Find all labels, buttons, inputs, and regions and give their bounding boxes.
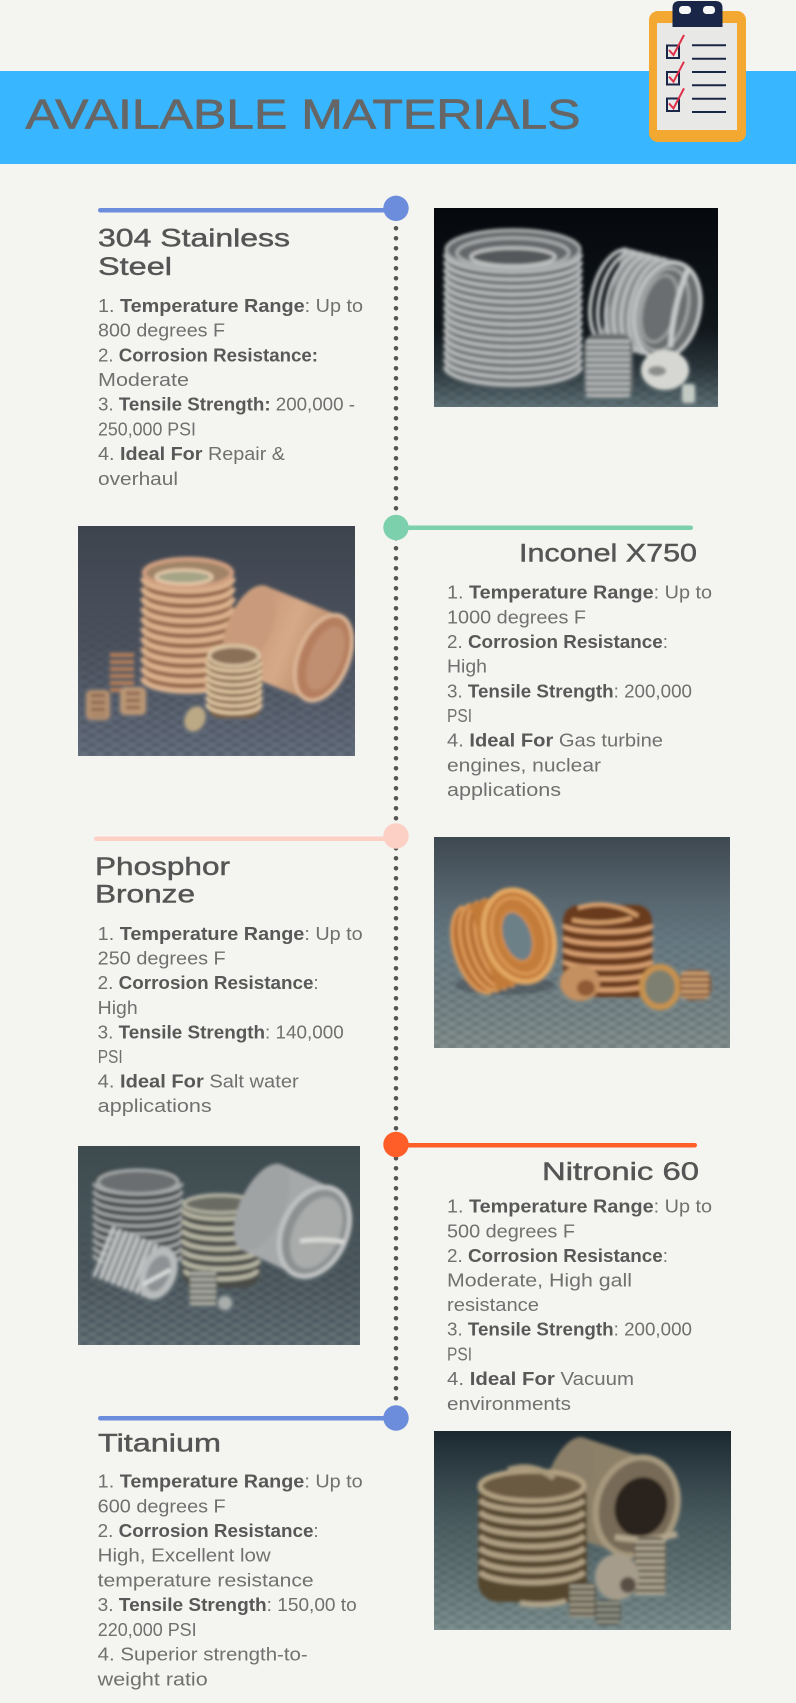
- heading: 304 Stainless Steel: 304 Stainless: [98, 225, 290, 253]
- text block: Inconel specs: 1. Temperature Range : Up to: [447, 583, 712, 603]
- timeline node 2: [383, 515, 409, 540]
- heading: 304 Stainless Steel: [98, 225, 290, 281]
- text block: Phosphor Bronze specs: High: [98, 998, 138, 1018]
- text block: Titanium specs: 4. Superior strength-to-: [98, 1645, 308, 1665]
- text block: Phosphor Bronze specs: applications: [98, 1096, 212, 1116]
- panel: 304 Stainless Steel: [98, 196, 409, 489]
- text block: Titanium specs: weight ratio: [97, 1670, 208, 1690]
- text block: Nitronic specs: 4. Ideal For Vacuum: [447, 1369, 634, 1389]
- photo: stainless steel coils: [434, 208, 718, 407]
- text block: 304 specs: 2. Corrosion Resistance:: [98, 345, 318, 365]
- photo: inconel coils: [78, 526, 355, 756]
- text block: Inconel specs: applications: [447, 780, 561, 800]
- heading: Phosphor Bronze: [95, 853, 230, 909]
- text block: Titanium specs: 3. Tensile Strength : 150,00 to: [98, 1595, 357, 1615]
- connector line 4: [396, 1143, 697, 1148]
- text block: Inconel specs: 2. Corrosion Resistance :: [447, 632, 668, 652]
- timeline dotted line: [394, 228, 398, 1400]
- text block: Nitronic specs: Moderate, High gall: [447, 1271, 632, 1291]
- text block: Inconel specs: PSI: [447, 706, 472, 726]
- text block: 304 specs: 250,000 PSI: [98, 419, 196, 439]
- text block: Titanium specs: 2. Corrosion Resistance :: [98, 1521, 319, 1541]
- heading: Nitronic 60: Nitronic 60: [542, 1158, 699, 1186]
- photo: phosphor bronze coils: [434, 837, 730, 1048]
- text block: Inconel specs: 3. Tensile Strength : 200,000: [447, 681, 692, 701]
- text block: Inconel specs: 4. Ideal For Gas turbine: [447, 731, 663, 751]
- title: AVAILABLE MATERIALS: [26, 90, 580, 137]
- text block: Phosphor Bronze specs: PSI: [98, 1047, 123, 1067]
- text block: Nitronic specs: 2. Corrosion Resistance :: [447, 1246, 668, 1266]
- photo: nitronic coils: [78, 1146, 360, 1345]
- text block: 304 specs: overhaul: [98, 469, 178, 489]
- text block: 304 specs: [98, 296, 363, 489]
- text block: 304 specs: 3. Tensile Strength: 200,000 -: [98, 395, 355, 415]
- panel: Inconel X750: [383, 515, 712, 800]
- connector line 5: [98, 1416, 396, 1420]
- timeline node 5: [383, 1405, 409, 1431]
- text block: Inconel specs: 1000 degrees F: [447, 607, 586, 627]
- text block: 304 specs: Moderate: [98, 370, 189, 390]
- text block: 304 specs: 800 degrees F: [98, 321, 225, 341]
- text block: 304 specs: 4. Ideal For Repair &: [98, 444, 285, 464]
- connector line 1: [98, 208, 396, 212]
- text block: Titanium specs: High, Excellent low: [98, 1546, 272, 1566]
- text block: Nitronic specs: 3. Tensile Strength : 200,000: [447, 1320, 692, 1340]
- connector line 3: [94, 836, 396, 841]
- heading: Inconel X750: Inconel X750: [519, 540, 697, 568]
- icon: clipboard checklist: [649, 1, 746, 142]
- text block: Phosphor Bronze specs: 1. Temperature Range : Up to: [98, 924, 363, 944]
- text block: Nitronic specs: [447, 1197, 712, 1414]
- text block: Nitronic specs: PSI: [447, 1344, 472, 1364]
- panel: Phosphor Bronze: [94, 823, 409, 1116]
- text block: Inconel specs: High: [447, 657, 487, 677]
- text block: Titanium specs: 600 degrees F: [98, 1496, 226, 1516]
- text block: Titanium specs: 220,000 PSI: [98, 1620, 197, 1640]
- text block: Phosphor Bronze specs: 250 degrees F: [98, 949, 226, 969]
- timeline node 1: [383, 196, 409, 221]
- heading: Phosphor Bronze: Bronze: [95, 881, 195, 909]
- panel: Titanium: [97, 1405, 409, 1690]
- text block: Phosphor Bronze specs: [98, 924, 363, 1116]
- text block: Nitronic specs: environments: [447, 1394, 571, 1414]
- text block: Titanium specs: [97, 1472, 363, 1690]
- text block: Inconel specs: engines, nuclear: [447, 755, 601, 775]
- text block: Titanium specs: temperature resistance: [98, 1570, 314, 1590]
- text block: Phosphor Bronze specs: 2. Corrosion Resistance :: [98, 973, 319, 993]
- text block: Phosphor Bronze specs: 4. Ideal For Salt water: [98, 1072, 299, 1092]
- heading: Titanium: Titanium: [98, 1430, 221, 1458]
- heading: 304 Stainless Steel: Steel: [98, 253, 172, 281]
- text block: 304 specs: 1. Temperature Range : Up to: [98, 296, 363, 316]
- heading: Phosphor Bronze: Phosphor: [95, 853, 230, 881]
- text block: Nitronic specs: 500 degrees F: [447, 1221, 575, 1241]
- text block: Inconel specs: [447, 583, 712, 800]
- connector line 2: [396, 526, 693, 530]
- header band: [0, 71, 796, 164]
- timeline node 4: [383, 1132, 409, 1157]
- panel: Nitronic 60: [383, 1132, 712, 1414]
- text block: Titanium specs: 1. Temperature Range : Up to: [98, 1472, 363, 1492]
- text block: Phosphor Bronze specs: 3. Tensile Strength : 140,000: [98, 1022, 344, 1042]
- text block: Nitronic specs: resistance: [447, 1295, 539, 1315]
- photo: titanium coils: [434, 1431, 731, 1630]
- text block: Nitronic specs: 1. Temperature Range : Up to: [447, 1197, 712, 1217]
- timeline node 3: [383, 823, 409, 849]
